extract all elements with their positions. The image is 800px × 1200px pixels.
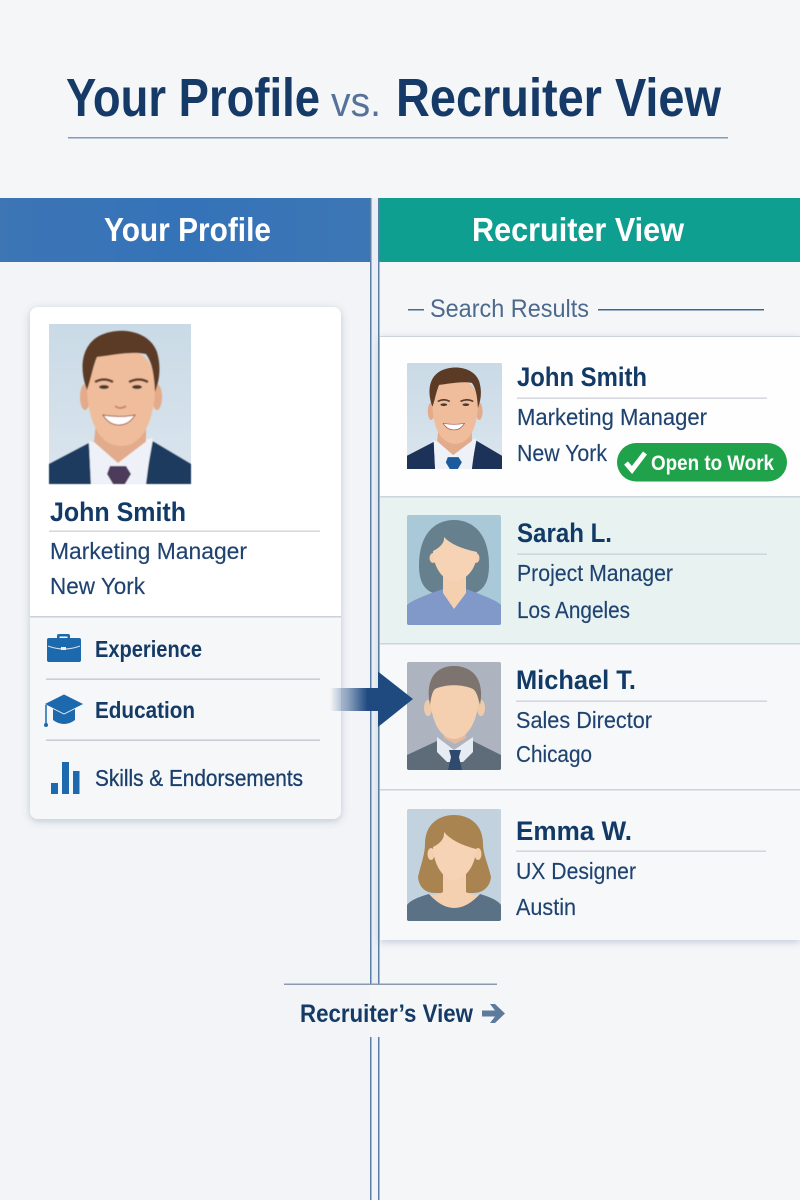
search results heading: Search Results	[430, 295, 589, 323]
panel: search results list	[380, 336, 800, 940]
panel header: your profile: Your Profile	[104, 211, 271, 248]
name: John Smith: John Smith	[50, 497, 186, 527]
title: vs.	[331, 78, 381, 125]
result row: Sarah L.: Los Angeles	[517, 597, 630, 623]
job title: Marketing Manager	[50, 538, 247, 564]
result row: Sarah L.	[380, 496, 800, 643]
icon: right arrow	[482, 1004, 505, 1023]
title: Your Profile	[66, 68, 320, 128]
result row: John Smith: Marketing Manager	[517, 404, 707, 430]
portrait: Emma placeholder	[407, 809, 501, 921]
panel header: your profile	[0, 198, 370, 262]
badge: open to work: Open to Work	[651, 452, 774, 475]
result row: Emma W.: Austin	[516, 894, 576, 920]
result row: Michael T.: Chicago	[516, 741, 592, 767]
panel header: recruiter view: Recruiter View	[472, 211, 684, 248]
result row: Emma W.: UX Designer	[516, 858, 636, 884]
portrait: Michael placeholder	[407, 662, 501, 770]
title	[66, 68, 722, 128]
result row: John Smith: New York	[517, 440, 607, 466]
icon: graduation cap	[44, 694, 84, 727]
result row: Michael T.: Michael T.	[516, 665, 636, 695]
title: Recruiter View	[396, 68, 722, 128]
result row: Sarah L.: Project Manager	[517, 560, 673, 586]
result row: John Smith: John Smith	[517, 362, 647, 392]
label: skills and endorsements: Skills & Endorsements	[95, 765, 303, 791]
portrait: John Smith small	[407, 363, 502, 469]
icon: briefcase	[47, 634, 81, 662]
result row: Michael T.	[380, 643, 800, 770]
result row: Emma W.	[380, 789, 800, 921]
location: New York	[50, 573, 145, 599]
result row: Michael T.: Sales Director	[516, 707, 652, 733]
panel header: recruiter view	[379, 198, 800, 262]
result row: Sarah L.: Sarah L.	[517, 518, 612, 548]
portrait: Sarah placeholder	[407, 515, 501, 625]
label: experience: Experience	[95, 636, 202, 662]
arrow: profile to recruiter	[330, 672, 413, 727]
icon: bar chart	[51, 762, 80, 794]
footer label: recruiter's view: Recruiter’s View	[300, 1000, 473, 1028]
panel: profile card	[30, 307, 341, 819]
badge: open to work	[617, 443, 787, 482]
label: education: Education	[95, 697, 195, 723]
portrait: John Smith large	[49, 324, 191, 484]
result row: Emma W.: Emma W.	[516, 816, 632, 846]
result row: John Smith	[380, 337, 800, 496]
